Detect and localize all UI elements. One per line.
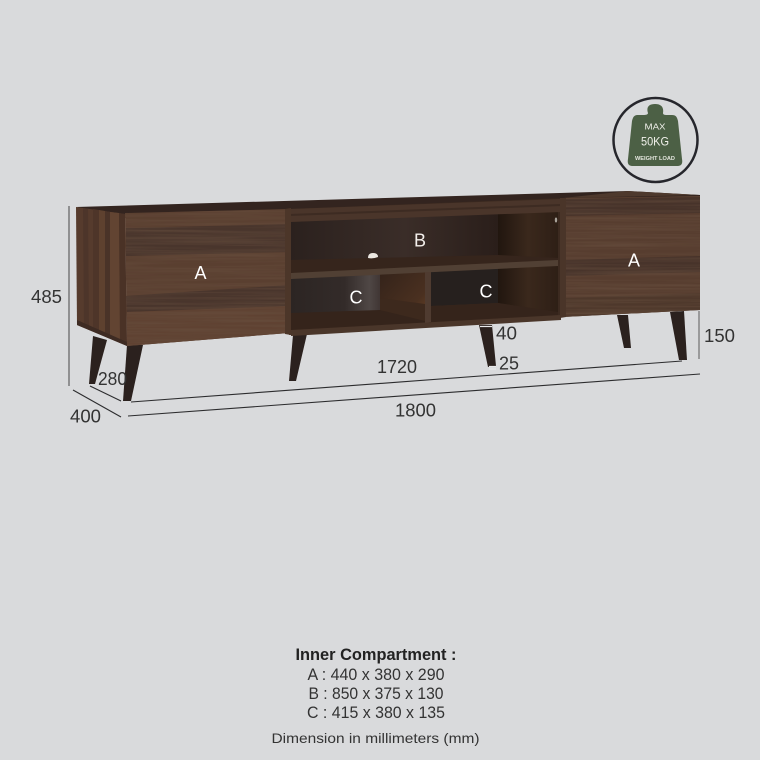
hinge — [555, 218, 557, 222]
cabinet legs — [89, 311, 687, 401]
compartment label: C left: C — [350, 288, 362, 308]
infographic canvas — [31, 96, 734, 746]
inner width 1720: 1720 — [377, 357, 417, 377]
inner compartment notes — [272, 646, 480, 746]
middle shelf — [291, 255, 558, 273]
lower back right — [431, 268, 498, 306]
compartment label: C right: C — [480, 282, 492, 302]
units note: Dimension in millimeters (mm) — [272, 730, 480, 746]
TV cabinet — [76, 191, 705, 350]
upper back panel — [291, 212, 498, 260]
top rail — [289, 199, 561, 222]
open compartment — [289, 198, 563, 336]
bottom shelf — [291, 303, 558, 330]
badge text: max: MAX — [644, 122, 666, 132]
leg tick marks — [480, 326, 496, 369]
leg bottom 25: 25 — [499, 354, 519, 374]
height 485: 485 — [31, 287, 62, 307]
compartment C size: C : 415 x 380 x 135 — [307, 704, 445, 722]
right door — [560, 192, 705, 322]
upper right inner side — [498, 210, 558, 258]
weight load badge — [614, 98, 698, 182]
cable hole — [368, 253, 378, 258]
left door — [120, 205, 295, 350]
divider — [425, 272, 431, 323]
dimension labels — [31, 287, 735, 426]
compartment label: B: B — [414, 230, 426, 250]
compartment label: A left: A — [194, 263, 206, 283]
dimension lines — [69, 206, 700, 417]
compartment B size: B : 850 x 375 x 130 — [308, 685, 444, 703]
leg top 40: 40 — [496, 324, 517, 344]
leg height 150: 150 — [704, 326, 735, 346]
depth 280: 280 — [98, 369, 127, 389]
lower back middle wood — [380, 272, 425, 322]
width 1800: 1800 — [395, 400, 436, 420]
badge text: weight load: WEIGHT LOAD — [635, 156, 675, 162]
cabinet top surface — [76, 191, 700, 218]
side panel — [76, 207, 127, 346]
notes heading: Inner Compartment : — [296, 646, 456, 664]
compartment label: A right: A — [628, 250, 640, 270]
compartment A size: A : 440 x 380 x 290 — [308, 666, 444, 684]
badge text: 50kg: 50KG — [641, 134, 669, 148]
icon: weight — [628, 104, 682, 166]
lower right inner side — [498, 265, 558, 313]
lower back left — [291, 274, 380, 314]
depth 400: 400 — [70, 406, 101, 426]
